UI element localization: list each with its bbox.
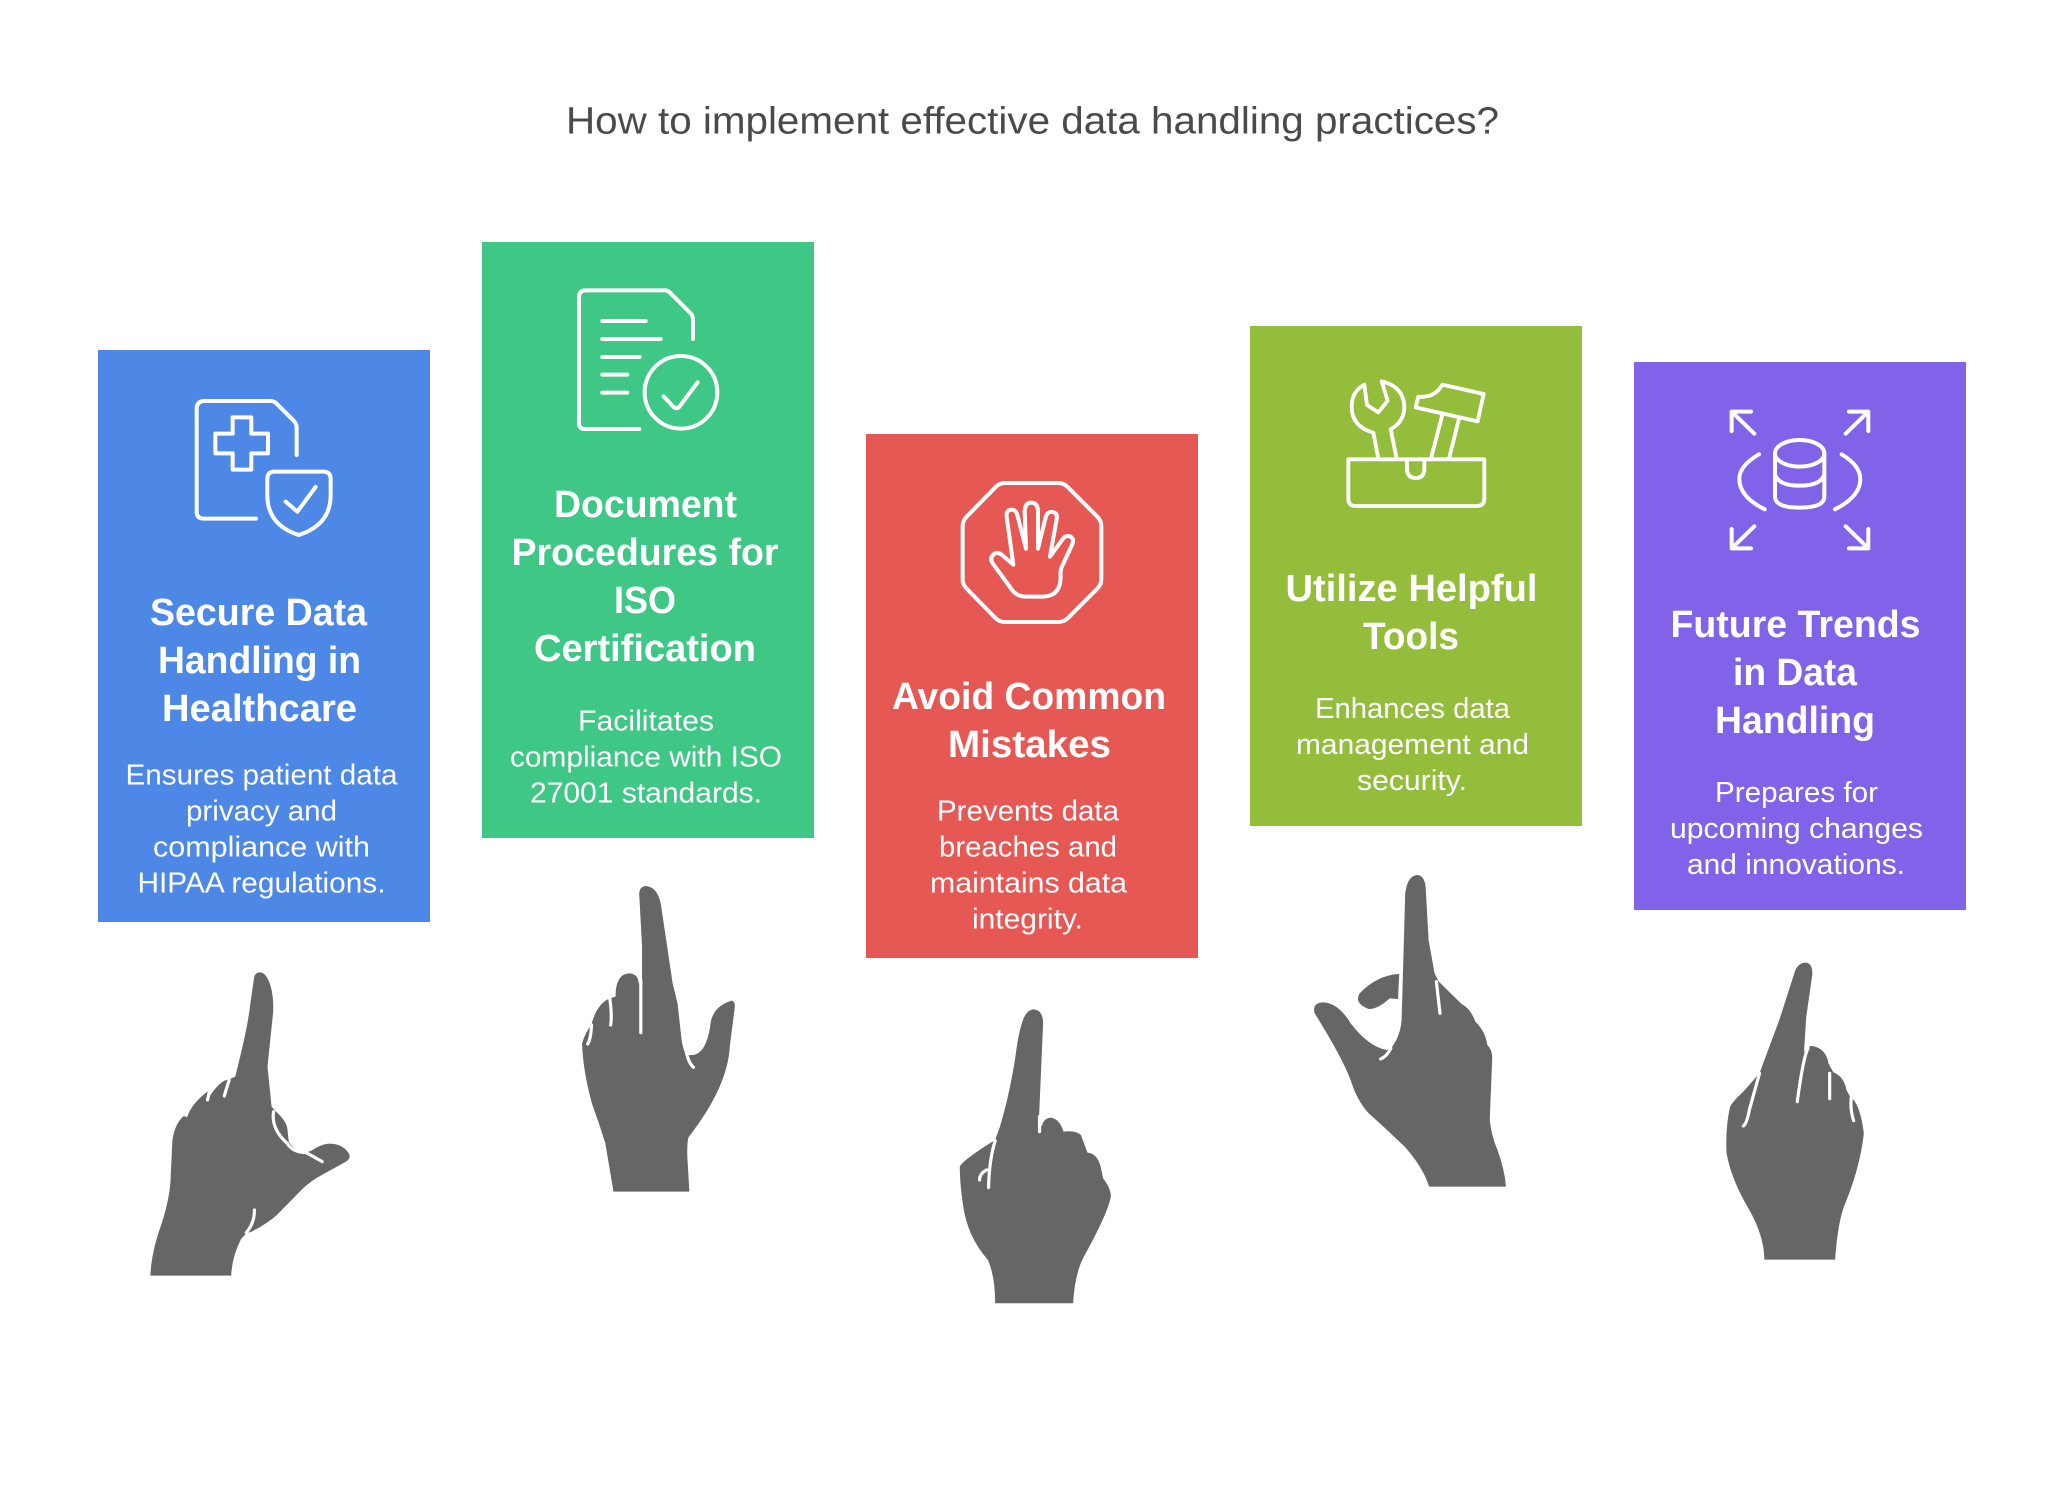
card background: purple: [1634, 362, 1966, 910]
heading: Secure Data: [150, 591, 368, 634]
heading: [150, 591, 368, 730]
heading: [1670, 603, 1920, 742]
heading: Tools: [1363, 615, 1459, 658]
icon: pointing hand 5: [1726, 963, 1864, 1260]
description: Ensures patient data: [126, 760, 398, 792]
icon: pointing hand 1: [150, 972, 350, 1276]
icon: pointing hand 3: [960, 1009, 1111, 1303]
card background: lime: [1250, 326, 1582, 826]
description: [1296, 693, 1529, 797]
description: [126, 760, 398, 900]
heading: Procedures for: [512, 531, 779, 574]
title: How to implement effective data handling practices?: [566, 100, 1499, 142]
description: [1670, 777, 1923, 881]
description: Enhances data: [1315, 693, 1511, 725]
heading: Utilize Helpful: [1286, 567, 1538, 610]
description: Facilitates: [578, 705, 714, 737]
icon: stop sign with hand: [963, 483, 1101, 622]
panel: utilize helpful tools: [1250, 326, 1582, 826]
icon: database with expanding arrows: [1732, 412, 1868, 548]
icon: pointing hand 4: [1314, 875, 1506, 1187]
description: privacy and: [186, 796, 337, 828]
description: management and: [1296, 729, 1529, 761]
icon: pointing hand 2: [582, 886, 735, 1192]
description: Prevents data: [937, 795, 1120, 827]
heading: [1286, 567, 1538, 658]
panel: avoid common mistakes: [866, 434, 1198, 958]
description: Prepares for: [1715, 777, 1878, 809]
heading: ISO: [614, 579, 676, 622]
description: integrity.: [972, 903, 1083, 935]
heading: Mistakes: [948, 723, 1111, 766]
description: [510, 705, 782, 809]
panel: future trends in data handling: [1634, 362, 1966, 910]
heading: in Data: [1733, 651, 1858, 694]
heading: [512, 483, 779, 670]
heading: [892, 675, 1166, 766]
heading: Certification: [534, 627, 756, 670]
icon: document with check mark: [579, 290, 717, 429]
panel: secure data handling in healthcare: [98, 350, 430, 922]
heading: Avoid Common: [892, 675, 1166, 718]
heading: Future Trends: [1670, 603, 1920, 646]
heading: Healthcare: [162, 687, 357, 730]
heading: Handling: [1715, 699, 1875, 742]
icon: toolbox with wrench and hammer: [1348, 381, 1484, 506]
card background: blue: [98, 350, 430, 922]
heading: Handling in: [158, 639, 361, 682]
description: 27001 standards.: [530, 777, 762, 809]
description: breaches and: [939, 831, 1117, 863]
heading: Document: [554, 483, 737, 526]
description: compliance with: [153, 832, 370, 864]
description: maintains data: [930, 867, 1128, 899]
description: HIPAA regulations.: [138, 868, 386, 900]
card background: green: [482, 242, 814, 838]
description: security.: [1357, 765, 1467, 797]
description: upcoming changes: [1670, 813, 1923, 845]
description: [930, 795, 1128, 935]
description: compliance with ISO: [510, 741, 782, 773]
description: and innovations.: [1687, 849, 1905, 881]
card background: red: [866, 434, 1198, 958]
panel: document procedures for ISO certification: [482, 242, 814, 838]
icon: medical document with shield: [197, 401, 331, 535]
